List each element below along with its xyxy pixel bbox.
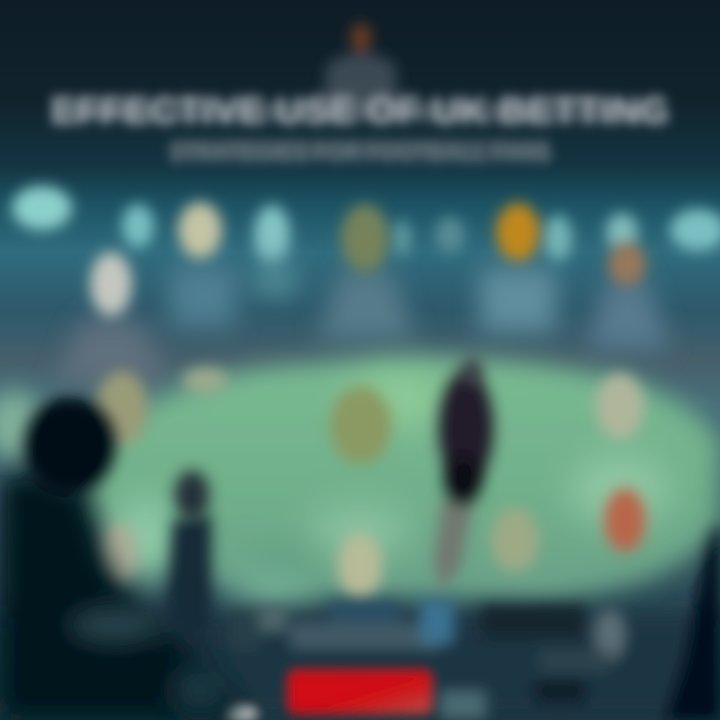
- raised arm: [165, 515, 212, 640]
- marker: pale left: [100, 522, 138, 584]
- icon: amber medallion: [496, 203, 540, 261]
- pitch markers: [96, 367, 646, 599]
- foreground spectator, left: [0, 397, 250, 720]
- head: [24, 397, 116, 493]
- marker: pale top right: [596, 373, 644, 439]
- title: EFFECTIVE USE OF UK BETTING: [50, 89, 670, 133]
- call to action: red button: [288, 670, 432, 714]
- icon: white medallion: [90, 252, 132, 316]
- foreground spectator, right: [665, 525, 720, 720]
- legs: [434, 500, 474, 590]
- player silhouette: [434, 358, 494, 590]
- icon: olive medallion: [341, 204, 389, 272]
- marker: small top: [182, 367, 228, 393]
- marker: red-orange: [604, 488, 646, 552]
- stand: figure pedestals: [56, 260, 670, 385]
- icon: bronze medallion: [608, 242, 646, 286]
- marker: cream bottom: [338, 533, 382, 599]
- pitch left edge highlight: [0, 391, 44, 459]
- head: [461, 358, 483, 386]
- dashboard widgets: [230, 600, 626, 720]
- marker: tan: [491, 508, 539, 572]
- blue widget: [420, 600, 454, 644]
- upper row of stat figures: [56, 202, 670, 385]
- hand: [174, 470, 210, 520]
- subtitle: STRATEGIES FOR FOOTBALL FANS: [168, 137, 552, 168]
- icon: cream medallion: [178, 202, 222, 258]
- shoulder highlight: [69, 607, 161, 643]
- pitch glow: [115, 375, 670, 611]
- panel: lower dashboard: [0, 600, 720, 720]
- small white glow at bottom: [225, 706, 257, 720]
- body: [0, 470, 250, 720]
- stadium lights row: [12, 186, 720, 265]
- emblem at top: [325, 23, 397, 110]
- torso: [438, 370, 494, 486]
- panel: green pitch: [0, 357, 720, 611]
- shorts: [444, 456, 482, 504]
- marker: khaki top left: [96, 371, 148, 445]
- marker: olive: [330, 386, 392, 464]
